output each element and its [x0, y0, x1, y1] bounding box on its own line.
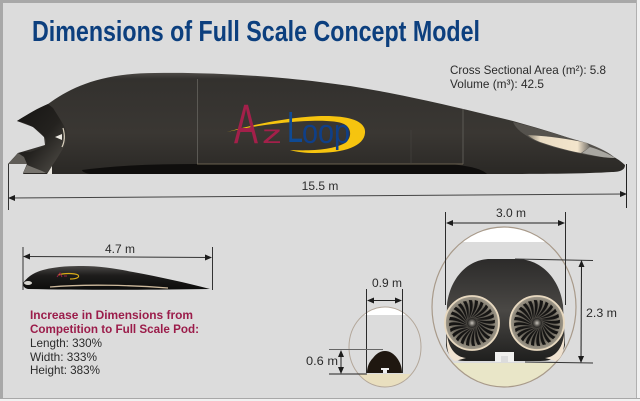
- dimension: 2.3 m: 2.3 m: [586, 306, 617, 320]
- logo: oop: [302, 113, 350, 151]
- text block: increase in dimensions: Length: 330%: [30, 336, 102, 350]
- dimension: 0.6 m: 0.6 m: [306, 354, 338, 368]
- dimension: 3.0 m: [446, 206, 566, 305]
- text block: cross section and volume: Volume (m³): 42.5: [450, 77, 544, 91]
- right fan: [510, 296, 564, 350]
- mini logo: [57, 273, 79, 279]
- mini pod: [23, 266, 210, 290]
- logo: z: [262, 119, 282, 149]
- logo: L: [287, 103, 303, 152]
- left fan: [445, 296, 499, 350]
- dimension: 0.9 m: [366, 276, 402, 373]
- underside shadow: [82, 164, 487, 174]
- text block: increase in dimensions: Height: 383%: [30, 363, 100, 377]
- dimension: 15.5 m: [8, 164, 626, 210]
- competition pod side view: [23, 266, 210, 290]
- dimension: 0.9 m: 0.9 m: [372, 276, 402, 290]
- large cross section: [430, 226, 580, 389]
- logo: [227, 92, 365, 155]
- panel lines: [198, 79, 463, 164]
- text block: increase in dimensions: Width: 333%: [30, 350, 97, 364]
- small cross section: [348, 306, 422, 388]
- dimension: 0.6 m: [306, 350, 383, 374]
- text block: increase in dimensions: Increase in Dimensions from: [30, 308, 193, 322]
- title: Dimensions of Full Scale Concept Model: [32, 16, 480, 48]
- tunnel scene: [454, 228, 554, 386]
- text block: cross section and volume: [450, 63, 606, 91]
- small pod front: [367, 351, 402, 373]
- dimension: 15.5 m: 15.5 m: [302, 179, 338, 193]
- dimension: 4.7 m: [23, 242, 212, 290]
- front inlet: [8, 104, 67, 173]
- logo swoosh: [227, 116, 365, 153]
- full scale pod side view: [8, 73, 625, 174]
- text block: increase in dimensions: Competition to Full Scale Pod:: [30, 322, 199, 336]
- inlet highlights: [55, 134, 62, 140]
- dimension: 3.0 m: 3.0 m: [496, 206, 526, 220]
- rear canopy: [513, 122, 615, 158]
- dimension: 4.7 m: 4.7 m: [105, 242, 135, 256]
- tunnel scene: [360, 308, 411, 386]
- logo: A: [234, 92, 258, 155]
- pod body: [8, 73, 625, 174]
- text block: increase in dimensions: [30, 308, 199, 377]
- text block: cross section and volume: Cross Sectional Area (m²): 5.8: [450, 63, 606, 77]
- dimension: 2.3 m: [515, 259, 617, 363]
- large pod front: [446, 259, 565, 361]
